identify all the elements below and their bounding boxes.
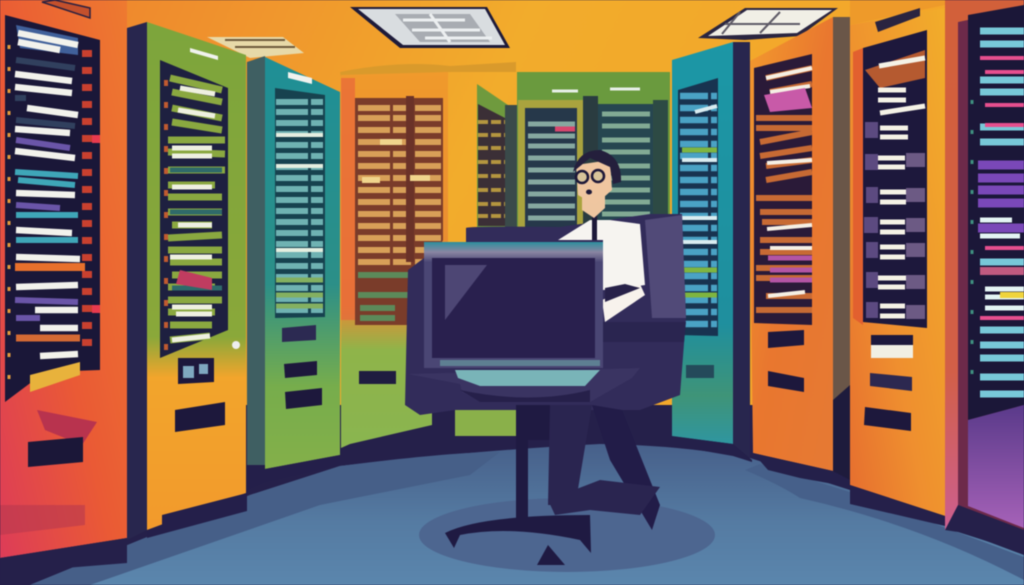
mouth bbox=[586, 190, 592, 194]
laptop monitor bbox=[424, 242, 603, 368]
back lower green panel bbox=[455, 405, 516, 436]
chair bbox=[405, 214, 686, 565]
chair base bbox=[445, 515, 591, 553]
server cabinet: teal right bbox=[670, 42, 752, 462]
server cabinet: left green and yellow bbox=[127, 22, 247, 540]
floor shadow: left of room bbox=[30, 452, 500, 585]
torso: white shirt bbox=[558, 220, 645, 290]
server cabinet: right centre orange with dark side bbox=[748, 17, 850, 487]
technician bbox=[548, 150, 660, 530]
ceiling light panel: right bbox=[698, 8, 838, 40]
chair armrest bbox=[600, 322, 686, 342]
back server rack: narrow green bbox=[477, 84, 517, 240]
server cabinet: far left red bbox=[0, 0, 127, 585]
chair back bbox=[405, 214, 686, 415]
floor shadow: right of room bbox=[745, 464, 1024, 580]
desk tray bbox=[408, 368, 640, 402]
ceiling light panel: centre bbox=[350, 7, 510, 48]
ceiling light panel: left bbox=[207, 37, 304, 58]
floor shadow ellipse under chair bbox=[419, 498, 715, 572]
glasses bbox=[576, 170, 604, 183]
face bbox=[576, 160, 612, 205]
back server racks: green pair bbox=[517, 72, 670, 240]
tie bbox=[592, 208, 597, 240]
foot bbox=[537, 545, 565, 565]
server cabinet: right orange bbox=[850, 0, 945, 526]
chair seat post bbox=[516, 405, 550, 518]
back wall shadow band bbox=[340, 62, 516, 78]
server cabinet: far right purple bbox=[945, 0, 1024, 553]
legs bbox=[548, 405, 592, 505]
neck bbox=[582, 195, 605, 218]
back base band bbox=[0, 405, 1024, 585]
floor bbox=[0, 444, 1024, 585]
back server rack: orange and green bbox=[341, 72, 448, 448]
server cabinet: left teal and green bbox=[245, 56, 340, 490]
hair bbox=[573, 150, 621, 184]
